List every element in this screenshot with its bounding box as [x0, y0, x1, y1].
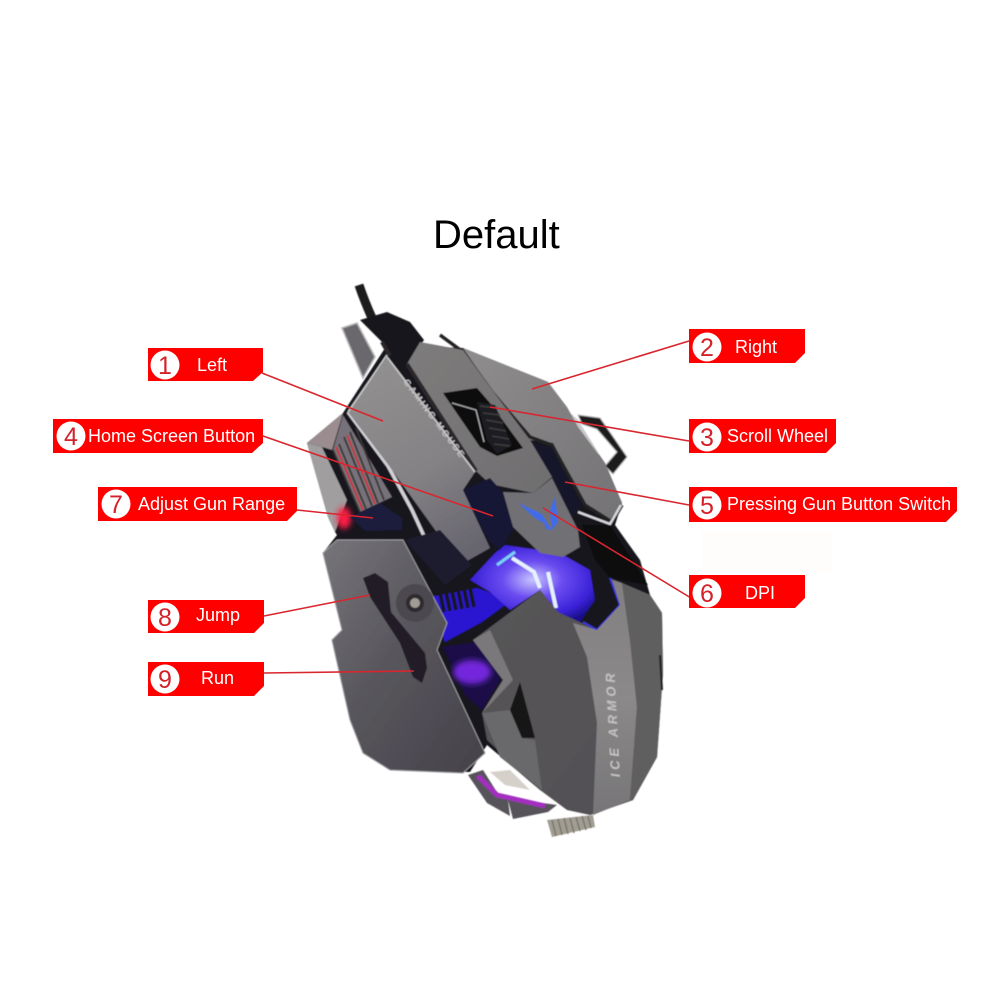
light strip	[573, 580, 637, 815]
scroll hole	[443, 388, 523, 456]
cable	[359, 285, 372, 318]
body blue trim	[583, 578, 620, 630]
label 3: Scroll Wheel: Scroll Wheel	[727, 426, 828, 446]
label 1: Left: 1	[158, 352, 172, 380]
label 7: Adjust Gun Range: Adjust Gun Range	[138, 494, 285, 514]
label 6: DPI: 6	[700, 580, 714, 608]
label 1: Left	[148, 348, 263, 381]
label 5: Pressing Gun Button Switch: 5	[700, 492, 714, 520]
title: Default	[433, 213, 560, 257]
label 3: Scroll Wheel: 3	[700, 424, 714, 452]
leader lines	[262, 341, 691, 673]
DPI plate	[503, 478, 580, 557]
center strip left groove	[382, 342, 476, 471]
label 1: Left: Left	[197, 355, 227, 375]
label 8: Jump	[148, 600, 264, 633]
body left facet	[473, 630, 513, 713]
label 6: DPI: DPI	[745, 583, 775, 603]
label 5: Pressing Gun Button Switch: Pressing Gun Button Switch	[727, 494, 951, 514]
label 4: Home Screen Button: 4	[64, 423, 78, 451]
left ribbed side	[307, 413, 402, 532]
center strip	[407, 342, 552, 493]
rear left silver tab	[342, 323, 375, 378]
chrome edge under right button	[578, 505, 621, 524]
label 5: Pressing Gun Button Switch	[689, 487, 957, 522]
faint smudge box	[702, 532, 832, 572]
label 4: Home Screen Button	[53, 419, 263, 453]
body side vent	[510, 682, 535, 738]
side plate	[323, 540, 485, 773]
right button	[463, 348, 622, 520]
body right shading	[622, 583, 663, 800]
front body	[473, 578, 663, 815]
label 6: DPI	[689, 575, 805, 608]
label 4: Home Screen Button: Home Screen Button	[88, 426, 255, 446]
left button	[348, 357, 490, 565]
rear purple base	[468, 770, 557, 819]
mouse photo illustration	[307, 285, 663, 837]
left button blue recess	[463, 478, 515, 550]
label 8: Jump: 8	[158, 604, 172, 632]
right side slit	[660, 655, 662, 690]
ice armor lettering: ICE ARMOR	[603, 672, 623, 778]
label 3: Scroll Wheel	[689, 419, 836, 453]
gaming mouse lettering: GAMING MOUSE	[401, 377, 467, 459]
label 9: Run: Run	[201, 668, 234, 688]
scroll wheel	[452, 402, 512, 454]
label 7: Adjust Gun Range: 7	[109, 491, 123, 519]
right button dark groove	[440, 335, 622, 522]
chrome rail	[348, 412, 436, 562]
label 2: Right: 2	[700, 334, 714, 362]
body lower-left facet	[482, 710, 542, 790]
dark silhouette underlay	[307, 345, 662, 815]
knurled wheel	[547, 815, 595, 837]
left button edge	[348, 355, 475, 472]
side knob	[396, 584, 434, 622]
label 8: Jump: Jump	[196, 605, 240, 625]
spring	[439, 583, 474, 612]
dark window	[530, 442, 582, 516]
strain relief	[360, 312, 424, 364]
rear right bracket	[567, 410, 627, 484]
center glow cavity	[405, 525, 648, 710]
DPI logo	[518, 497, 558, 530]
label 2: Right	[689, 329, 805, 363]
label 2: Right: Right	[735, 337, 777, 357]
label 7: Adjust Gun Range	[98, 487, 297, 521]
side buttons	[363, 573, 427, 683]
label 9: Run: 9	[158, 666, 172, 694]
label 9: Run	[148, 662, 264, 696]
